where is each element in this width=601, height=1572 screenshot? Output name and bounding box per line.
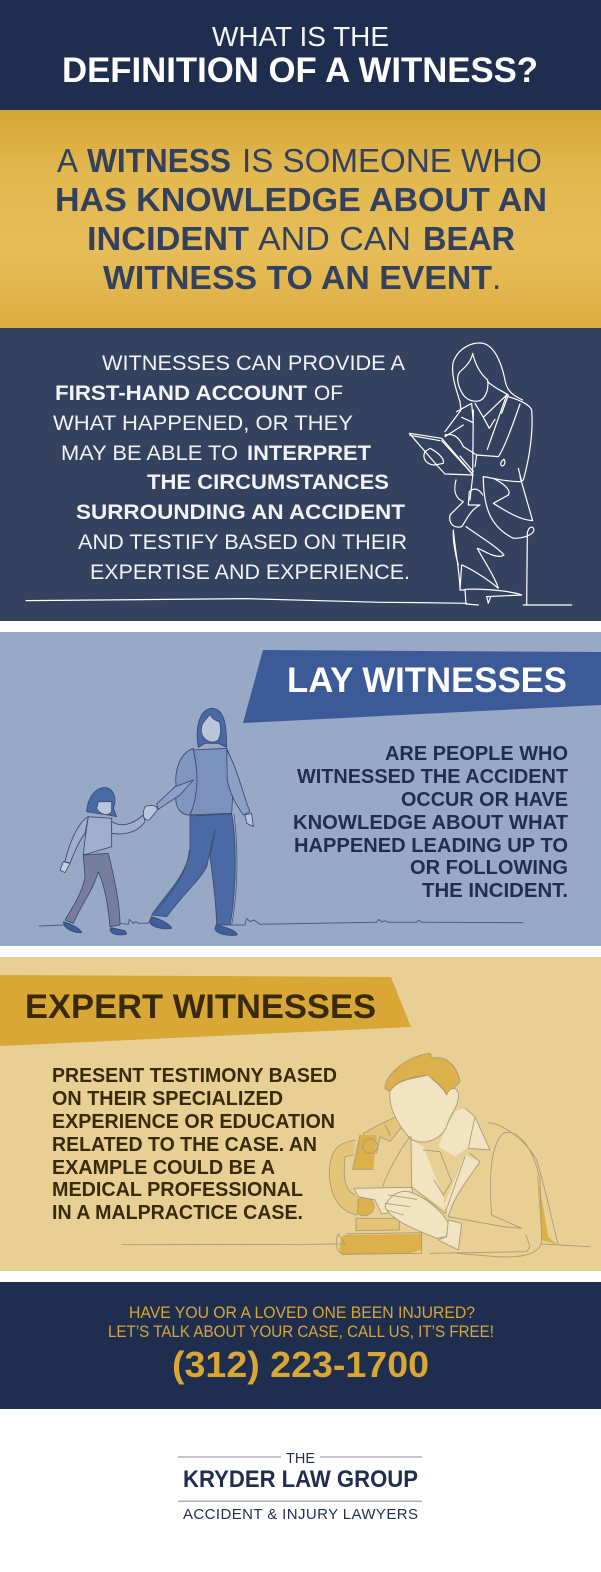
text block: expert description: EXAMPLE COULD BE A — [52, 1157, 275, 1179]
logo: the kryder law group: THE — [286, 1451, 315, 1467]
text block: expert description: IN A MALPRACTICE CASE. — [52, 1202, 303, 1224]
illustration: scientist at microscope — [122, 1053, 590, 1257]
text block: definition: INCIDENT — [87, 221, 250, 258]
text block: account: INTERPRET — [247, 441, 371, 465]
text block: lay description: THE INCIDENT. — [422, 880, 568, 902]
illustration: mother and child walking — [39, 708, 523, 935]
text block: definition — [55, 143, 547, 297]
text block: account: MAY BE ABLE TO — [61, 441, 238, 465]
logo: the kryder law group — [178, 1451, 422, 1523]
text block: lay description — [293, 743, 569, 902]
text block: definition: BEAR — [423, 221, 515, 258]
text block: expert description: EXPERIENCE OR EDUCATION — [52, 1111, 335, 1133]
text: call us: LET’S TALK ABOUT YOUR CASE, CALL US, IT’S FREE! — [108, 1323, 494, 1341]
text block: lay description: OCCUR OR HAVE — [401, 789, 568, 811]
banner: expert witnesses: EXPERT WITNESSES — [25, 988, 376, 1026]
figure: mother — [150, 708, 253, 935]
text block: account — [53, 351, 410, 584]
text block: account: WHAT HAPPENED, OR THEY — [53, 411, 353, 435]
heading: definition of a witness: DEFINITION OF A WITNESS? — [62, 51, 538, 90]
text block: expert description: PRESENT TESTIMONY BASED — [52, 1065, 337, 1087]
banner: lay witnesses: LAY WITNESSES — [287, 661, 567, 700]
text block: definition: A — [57, 143, 79, 180]
text block: account: EXPERTISE AND EXPERIENCE. — [90, 560, 410, 584]
panel: title header — [0, 0, 601, 110]
text block: expert description: ON THEIR SPECIALIZED — [52, 1088, 283, 1110]
text block: account: SURROUNDING AN ACCIDENT — [76, 500, 405, 524]
text block: expert description — [52, 1065, 337, 1224]
panel: expert witnesses — [0, 957, 601, 1271]
ground line — [39, 917, 523, 926]
text block: expert description: MEDICAL PROFESSIONAL — [52, 1179, 303, 1201]
text block: definition: AND CAN — [258, 221, 411, 258]
scientist — [383, 1053, 590, 1257]
logo: the kryder law group: KRYDER LAW GROUP — [183, 1466, 418, 1493]
icon: line-art woman taking notes — [26, 343, 572, 605]
banner: expert witnesses — [0, 975, 411, 1046]
microscope — [122, 1115, 422, 1255]
text block: lay description: WITNESSED THE ACCIDENT — [297, 766, 569, 788]
text block: lay description: OR FOLLOWING — [410, 857, 568, 879]
text block: lay description: KNOWLEDGE ABOUT WHAT — [293, 812, 569, 834]
text: injured question: HAVE YOU OR A LOVED ONE BEEN INJURED? — [129, 1304, 475, 1322]
panel: lay witnesses — [0, 632, 601, 946]
text block: definition: WITNESS — [87, 143, 231, 180]
text block: account: WITNESSES CAN PROVIDE A — [102, 351, 406, 375]
logo: the kryder law group: ACCIDENT & INJURY LAWYERS — [183, 1506, 418, 1523]
text block: account: AND TESTIFY BASED ON THEIR — [78, 530, 407, 554]
text block: definition: HAS KNOWLEDGE ABOUT AN — [55, 182, 547, 219]
panel: call to action — [0, 1282, 601, 1409]
text block: lay description: HAPPENED LEADING UP TO — [294, 835, 568, 857]
text block: expert description: RELATED TO THE CASE. AN — [52, 1134, 317, 1156]
text block: lay description: ARE PEOPLE WHO — [385, 743, 568, 765]
text block: account: THE CIRCUMSTANCES — [147, 470, 389, 494]
text block: account: OF — [314, 381, 343, 405]
heading: what is the: WHAT IS THE — [212, 21, 389, 52]
text block: account: FIRST-HAND ACCOUNT — [55, 381, 307, 405]
text block: definition: IS SOMEONE WHO — [242, 143, 542, 180]
text block: definition: WITNESS TO AN EVENT — [103, 260, 493, 297]
panel: definition statement — [0, 110, 601, 328]
text block: definition: . — [492, 260, 501, 297]
phone number: (312) 223-1700 — [172, 1344, 429, 1385]
banner: lay witnesses — [243, 650, 601, 723]
figure: child — [60, 788, 157, 935]
panel: witness account — [0, 328, 601, 621]
